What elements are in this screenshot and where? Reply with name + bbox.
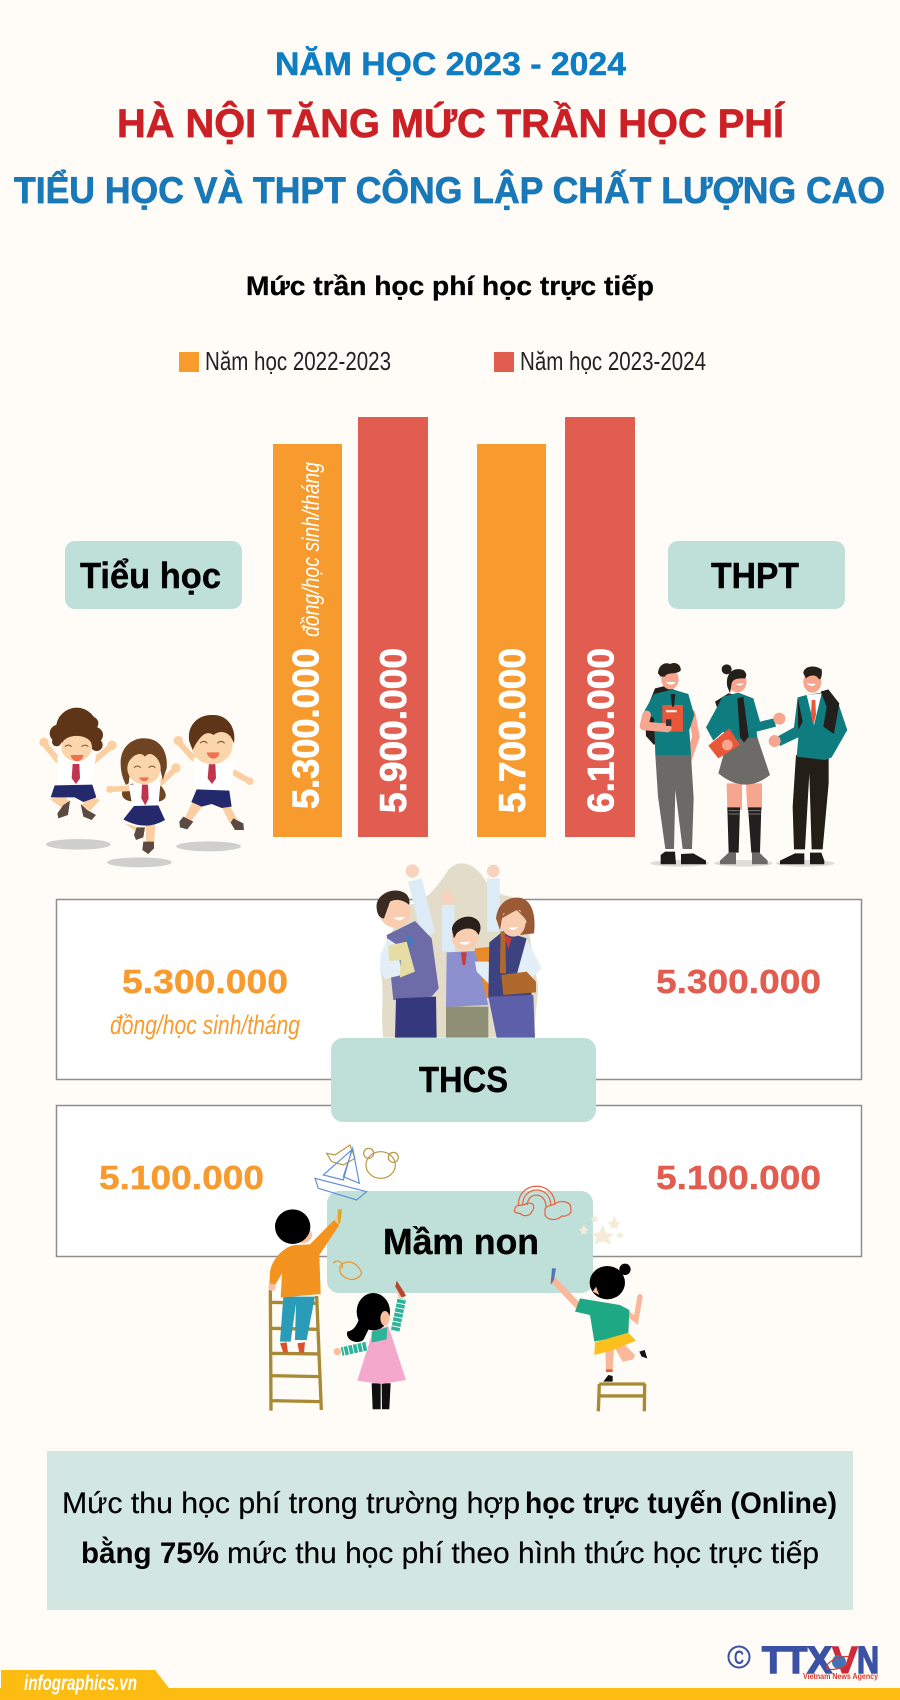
title line: school year: NĂM HỌC 2023 - 2024 <box>275 46 626 82</box>
bar: THPT 2022-2023 <box>477 444 546 837</box>
title line: subject: TIỂU HỌC VÀ THPT CÔNG LẬP CHẤT LƯỢNG CAO <box>14 169 885 211</box>
legend <box>179 346 706 376</box>
value: Mầm non 2022-2023: 5.100.000 <box>99 1159 264 1196</box>
bar: Tiểu học 2023-2024: 5.900.000 <box>373 648 414 813</box>
girl in pink dress <box>334 1281 406 1409</box>
note box: online tuition <box>47 1451 853 1610</box>
student 3 <box>769 666 847 864</box>
logo: TTXVN: TTX <box>762 1640 833 1682</box>
note line 1: Mức thu học phí trong trường hợp <box>62 1487 520 1520</box>
note line 2: bằng 75% <box>81 1536 219 1570</box>
kid 3 <box>174 715 254 830</box>
tag: THPT: THPT <box>711 555 799 596</box>
tag: Mầm non: Mầm non <box>383 1221 539 1262</box>
logo: TTXVN: N <box>857 1640 879 1682</box>
illustration: secondary school students <box>377 863 542 1038</box>
bar: Tiểu học 2022-2023: 5.300.000 <box>286 648 326 809</box>
title line: headline: HÀ NỘI TĂNG MỨC TRẦN HỌC PHÍ <box>117 100 785 146</box>
tag: THPT <box>668 541 845 609</box>
title block <box>14 46 885 211</box>
student middle <box>441 891 497 1038</box>
note line 1: học trực tuyến (Online) <box>525 1487 837 1520</box>
panel: THCS values <box>56 900 862 1080</box>
stars doodle <box>579 1214 624 1245</box>
value: THCS 2022-2023: 5.300.000 <box>122 963 288 1000</box>
note line 2: mức thu học phí theo hình thức học trực tiếp <box>227 1537 819 1570</box>
copyright mark: C <box>734 1648 744 1669</box>
doodles: cat, boat, bear, chicken <box>315 1145 398 1279</box>
bar: THPT 2023-2024: 6.100.000 <box>580 648 622 813</box>
illustration: kindergarten child right <box>514 1186 647 1411</box>
illustration: high school students <box>644 663 847 867</box>
footer site name: infographics.vn <box>24 1672 137 1695</box>
note line 1 <box>62 1487 837 1520</box>
student left <box>377 864 439 1038</box>
rainbow and clouds doodle <box>514 1186 571 1220</box>
footer bar <box>0 1670 900 1700</box>
bar chart: Tiểu học and THPT <box>273 417 635 837</box>
unit note: đồng/học sinh/tháng <box>110 1010 300 1040</box>
value: THCS 2023-2024: 5.300.000 <box>656 963 821 1000</box>
legend item: 2022-2023: Năm học 2022-2023 <box>205 346 391 376</box>
panel: Mầm non values <box>56 1106 862 1256</box>
bar: Tiểu học 2023-2024 <box>358 417 428 837</box>
illustration: primary school kids jumping <box>39 708 254 867</box>
student 1 <box>644 663 706 864</box>
value: Mầm non 2023-2024: 5.100.000 <box>656 1159 821 1196</box>
tag: THCS: THCS <box>419 1059 508 1100</box>
tag: Mầm non <box>327 1191 593 1293</box>
bar: Tiểu học 2022-2023: đồng/học sinh/tháng <box>298 461 325 637</box>
copyright mark <box>728 1646 750 1669</box>
tag: Tiểu học <box>65 541 242 609</box>
ladder <box>270 1290 321 1411</box>
girl on stool <box>551 1264 647 1382</box>
illustration: kindergarten children left <box>268 1145 406 1411</box>
bar: THPT 2023-2024 <box>565 417 635 837</box>
tag: Tiểu học: Tiểu học <box>80 555 221 596</box>
tag: THCS <box>331 1038 596 1122</box>
student right <box>487 865 542 1038</box>
bar: Tiểu học 2022-2023 <box>273 444 342 837</box>
section heading: Mức trần học phí học trực tiếp <box>246 271 654 301</box>
kid 2 <box>106 738 181 854</box>
logo: TTXVN: V <box>832 1640 859 1682</box>
logo: TTXVN: Vietnam News Agency <box>803 1671 878 1681</box>
student 2 <box>706 664 785 864</box>
kid 1 <box>39 708 117 820</box>
stool <box>598 1384 645 1411</box>
legend item: 2023-2024: Năm học 2023-2024 <box>520 346 706 376</box>
boy on ladder <box>268 1209 342 1353</box>
logo: TTXVN <box>728 1640 879 1682</box>
bar: THPT 2022-2023: 5.700.000 <box>492 648 533 813</box>
